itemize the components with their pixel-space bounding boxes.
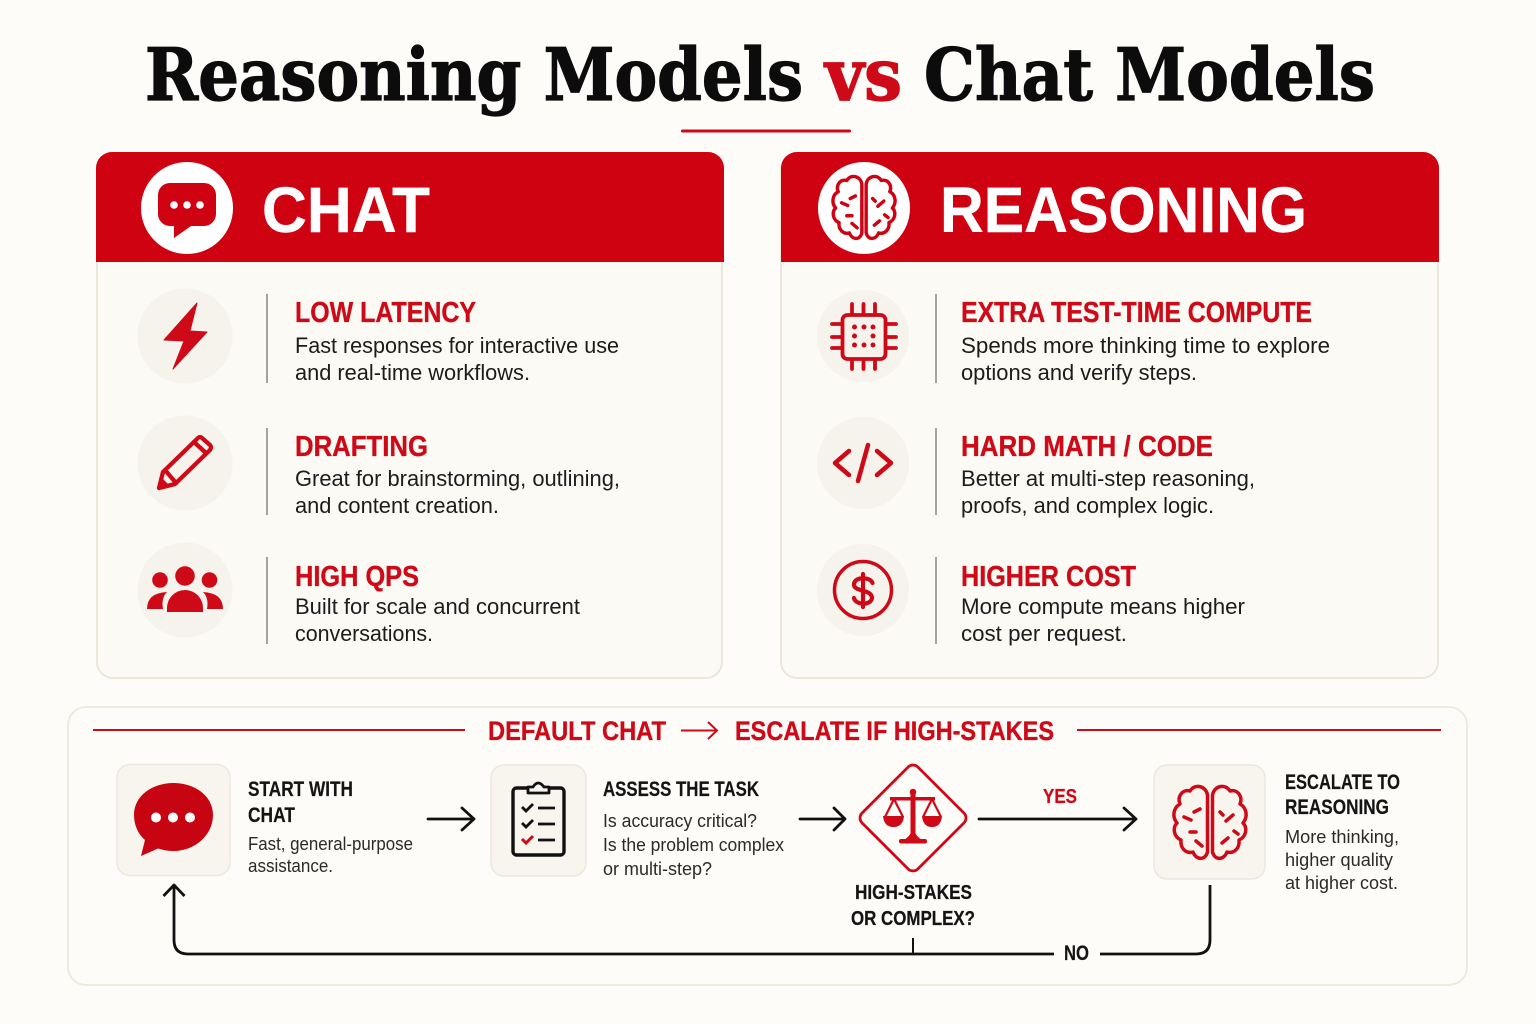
icon: scales in diamond (857, 762, 969, 874)
step: start with chat (117, 764, 413, 876)
item: extra test-time compute: Spends more thinking time to explore (961, 333, 1330, 358)
item: hard math / code: HARD MATH / CODE (961, 431, 1213, 463)
item: extra test-time compute: options and verify steps. (961, 360, 1197, 385)
step: escalate to reasoning: More thinking, (1285, 826, 1399, 847)
item: low latency: Fast responses for interactive use (295, 333, 619, 358)
step: assess the task: Is accuracy critical? (603, 810, 757, 831)
icon: processor chip (817, 290, 909, 382)
icon: checklist tile (491, 765, 586, 876)
title (145, 32, 1375, 117)
title: Reasoning Models (145, 32, 803, 117)
step: assess the task: ASSESS THE TASK (603, 778, 759, 801)
item: low latency: and real-time workflows. (295, 360, 530, 385)
item: hard math / code: proofs, and complex logic. (961, 493, 1214, 518)
panel: reasoning (781, 152, 1439, 678)
icon: speech bubble tile (117, 764, 230, 876)
step: start with chat: CHAT (248, 804, 295, 827)
flow heading: DEFAULT CHAT (488, 716, 666, 746)
item: hard math / code: Better at multi-step reasoning, (961, 466, 1255, 491)
step: decision (851, 762, 975, 930)
item: high qps: conversations. (295, 621, 433, 646)
arrow: no loop back to chat: NO (1064, 942, 1089, 965)
step: escalate to reasoning: higher quality (1285, 849, 1394, 870)
flow heading: ESCALATE IF HIGH-STAKES (735, 716, 1054, 746)
title: Chat Models (924, 32, 1375, 117)
item: higher cost: More compute means higher (961, 594, 1245, 619)
item: drafting (138, 416, 620, 518)
reasoning header band (781, 152, 1439, 262)
icon: brain badge (818, 162, 910, 254)
item: extra test-time compute (817, 290, 1330, 385)
icon: chat bubble badge (141, 162, 233, 254)
icon: code brackets (817, 417, 909, 509)
panel: escalation flow (68, 707, 1467, 985)
arrow: yes: YES (1043, 785, 1077, 808)
icon: lightning bolt (138, 288, 232, 384)
item: high qps: Built for scale and concurrent (295, 594, 581, 619)
step: decision: OR COMPLEX? (851, 908, 975, 930)
step: escalate to reasoning (1154, 765, 1400, 893)
panel: chat (96, 152, 724, 678)
item: higher cost: HIGHER COST (961, 561, 1137, 593)
step: decision: HIGH-STAKES (855, 882, 972, 904)
step: escalate to reasoning: at higher cost. (1285, 872, 1398, 893)
arrow: assess to decision (800, 808, 845, 830)
step: escalate to reasoning: ESCALATE TO (1285, 771, 1400, 794)
chat heading: CHAT (262, 174, 430, 246)
icon: brain tile (1154, 765, 1265, 879)
icon: people (138, 542, 232, 638)
icon: dollar coin (817, 544, 909, 636)
item: extra test-time compute: EXTRA TEST-TIME COMPUTE (961, 297, 1312, 329)
arrow: heading (681, 722, 717, 739)
step: start with chat: assistance. (248, 855, 333, 876)
step: assess the task: Is the problem complex (603, 834, 785, 855)
item: drafting: and content creation. (295, 493, 499, 518)
item: low latency: LOW LATENCY (295, 297, 476, 329)
arrow: chat to assess (428, 808, 474, 830)
title underline (681, 130, 851, 132)
step: start with chat: Fast, general-purpose (248, 833, 413, 854)
arrow: yes (979, 785, 1136, 830)
item: drafting: DRAFTING (295, 431, 428, 463)
step: start with chat: START WITH (248, 778, 353, 801)
reasoning heading: REASONING (940, 174, 1307, 246)
step: assess the task: or multi-step? (603, 858, 712, 879)
item: low latency (138, 288, 619, 385)
step: assess the task (491, 765, 785, 879)
item: higher cost: cost per request. (961, 621, 1127, 646)
chat header band (96, 152, 724, 262)
item: higher cost (817, 544, 1245, 646)
item: high qps (138, 542, 581, 646)
icon: pencil (138, 416, 232, 510)
title: vs (823, 32, 902, 117)
flow heading (93, 716, 1441, 746)
step: escalate to reasoning: REASONING (1285, 796, 1389, 819)
item: hard math / code (817, 417, 1255, 518)
arrow: no loop back to chat (164, 885, 1210, 965)
item: high qps: HIGH QPS (295, 561, 419, 593)
item: drafting: Great for brainstorming, outlining, (295, 466, 620, 491)
